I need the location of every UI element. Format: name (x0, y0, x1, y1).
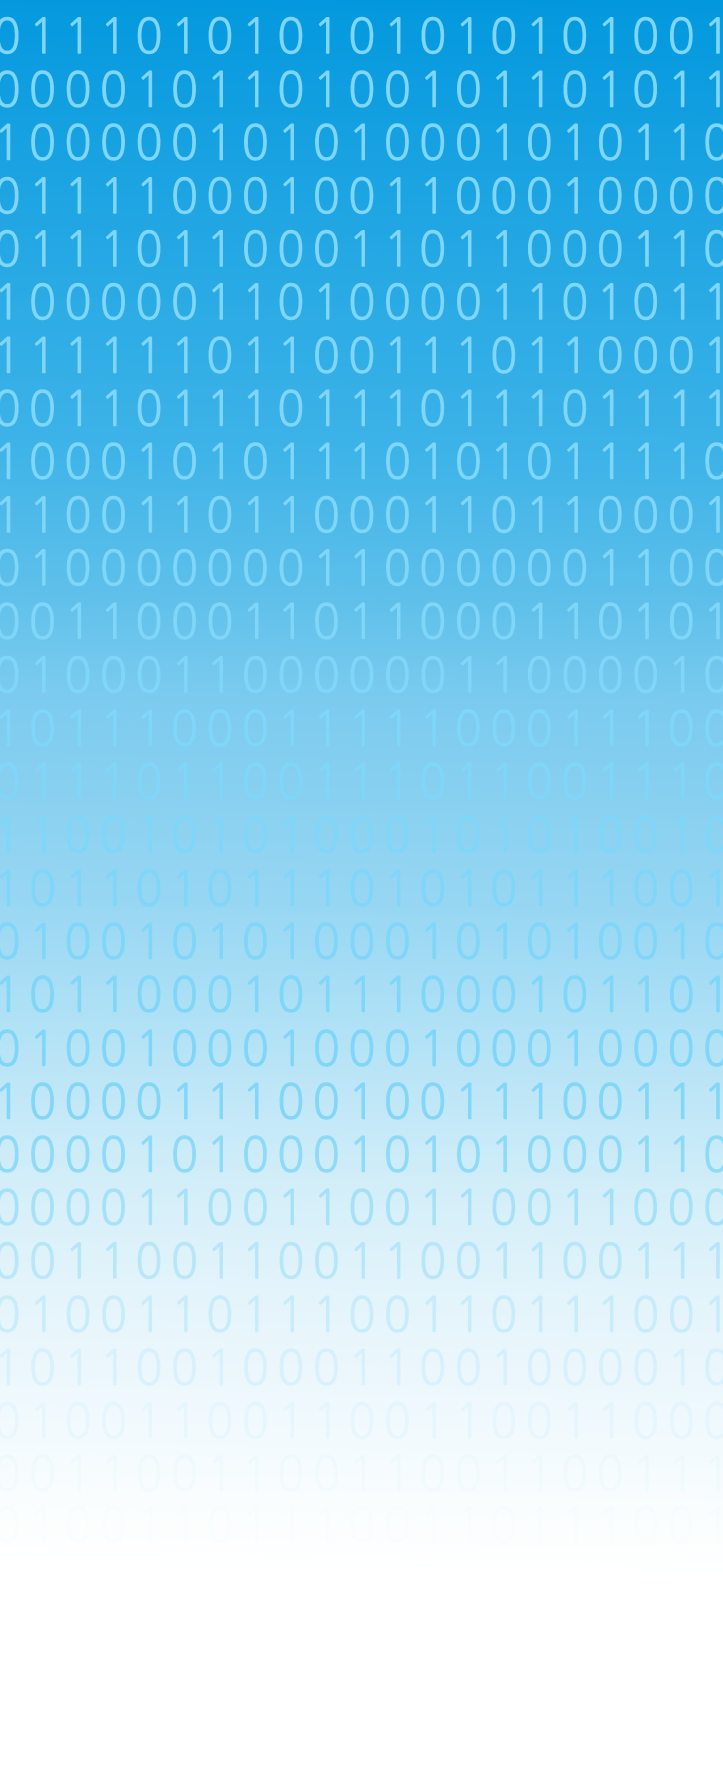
binary digit pattern: 110010101000101010010 (0, 811, 723, 860)
binary digit pattern: 100000101010001010110 (0, 119, 723, 167)
binary digit pattern: 101100100011001000010 (0, 1344, 723, 1392)
binary digit pattern: 001100110011001100111 (0, 1237, 723, 1286)
binary digit pattern: 111111011001110110001 (0, 331, 723, 380)
binary digit pattern: 011110001001100010000 (0, 172, 723, 221)
binary digit pattern: 011101010101010101001 (0, 12, 723, 61)
binary digit pattern: 110011011000110110001 (0, 491, 723, 540)
binary digit pattern: 010011001100110011000 (0, 1397, 723, 1446)
binary digit pattern: 101101011101010111001 (0, 864, 723, 913)
binary digit pattern: 100001110010011100111 (0, 1078, 723, 1126)
binary digit pattern: 010010001000100010000 (0, 1025, 723, 1073)
binary digit pattern: 000010100010101000110 (0, 1131, 723, 1179)
binary digit pattern: 100000110100001101011 (0, 278, 723, 327)
binary digit pattern: 000011001100110011000 (0, 1184, 723, 1232)
binary digit pattern: 011101100011011000110 (0, 225, 723, 274)
binary digit pattern: 100010101110101011110 (0, 438, 723, 486)
binary digit pattern: 011101100111011001110 (0, 758, 723, 806)
binary digit pattern: 010011011100110111001 (0, 1501, 723, 1550)
binary digit pattern: 000010110100101101011 (0, 65, 723, 114)
binary digit pattern: 010001100000011000010 (0, 651, 723, 700)
binary digit pattern: 101110001111100011100 (0, 705, 723, 753)
binary digit pattern: 001100011011000110101 (0, 598, 723, 646)
binary digit pattern: 001101110111011101111 (0, 385, 723, 433)
binary digit pattern: 010010101000101010010 (0, 917, 723, 966)
binary digit pattern: 101100010111000101101 (0, 971, 723, 1019)
binary digit pattern: 001100110011001100111 (0, 1450, 723, 1498)
binary digit pattern: 010011011100110111001 (0, 1291, 723, 1339)
binary digit pattern: 010000000110000001100 (0, 544, 723, 593)
